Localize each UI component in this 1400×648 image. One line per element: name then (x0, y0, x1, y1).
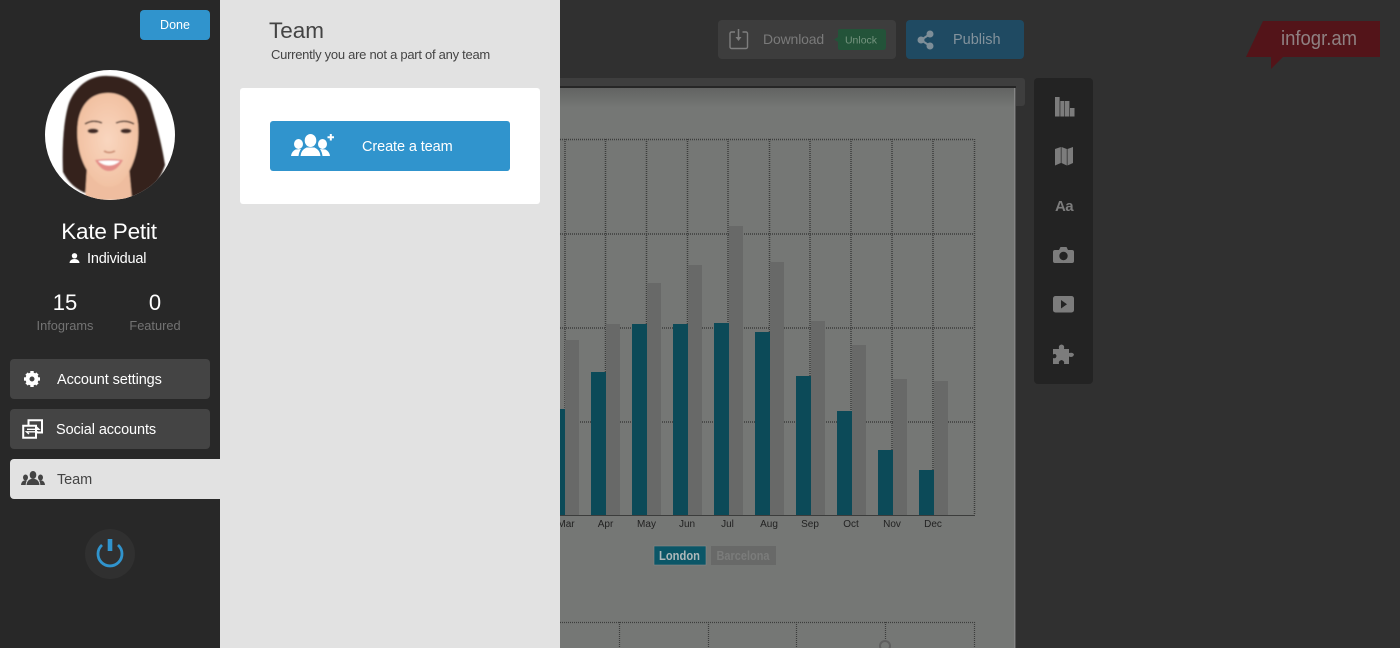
individual label: Individual (87, 251, 146, 267)
bar chart: London vs Barcelona (550, 139, 975, 516)
legend: London (659, 548, 700, 563)
editor canvas behind overlay (557, 78, 1025, 648)
menu: team active (10, 459, 220, 499)
legend: Barcelona (716, 548, 770, 563)
menu: account settings (10, 359, 210, 399)
month axis labels: Nov (883, 519, 901, 530)
month axis labels: Aug (760, 519, 778, 530)
team panel (220, 0, 560, 648)
stat: featured: 0 (149, 290, 161, 315)
publish button (906, 20, 1024, 59)
icon: puzzle (1053, 344, 1074, 364)
panel subtitle: Currently you are not a part of any team (271, 47, 490, 62)
done button (140, 10, 210, 40)
stat: infograms: 15 (53, 290, 77, 315)
download button (718, 20, 896, 59)
publish label: Publish (953, 32, 1001, 48)
canvas frame (540, 78, 1025, 106)
icon: map (1055, 147, 1073, 166)
white card (240, 88, 540, 204)
month axis labels: Mar (557, 519, 575, 530)
icon: chart (1055, 97, 1074, 116)
month axis labels: Dec (924, 519, 942, 530)
icon: text: Aa (1055, 198, 1073, 215)
icon: video (1053, 296, 1074, 312)
download label: Download (763, 31, 824, 47)
menu: social accounts (10, 409, 210, 449)
stat: infograms: Infograms (37, 318, 93, 333)
month axis labels: Apr (598, 519, 614, 530)
icon: team (21, 471, 45, 485)
label: Create a team (362, 139, 453, 155)
icon: power button (96, 539, 124, 568)
lower chart grid (560, 622, 974, 648)
icon: gear (24, 371, 40, 387)
done button: Done (160, 18, 190, 32)
label: Social accounts (56, 422, 156, 438)
label: Account settings (57, 372, 162, 388)
month axis labels: Jul (721, 519, 734, 530)
icon: social swap (22, 419, 43, 439)
month axis labels: Oct (843, 519, 859, 530)
tool palette (1034, 78, 1093, 384)
icon: add team (291, 134, 334, 156)
panel heading: Team (269, 18, 324, 43)
icon: camera (1053, 247, 1074, 263)
month axis labels: Jun (679, 519, 695, 530)
user name: Kate Petit (61, 219, 157, 244)
sidebar (10, 10, 220, 579)
infogr.am logo (1246, 21, 1380, 69)
icon: share (918, 30, 934, 50)
month axis labels (557, 519, 942, 530)
month axis labels: Sep (801, 519, 819, 530)
avatar photo (45, 70, 175, 200)
unlock badge (834, 29, 886, 50)
stat: featured (129, 290, 181, 333)
legend (654, 546, 776, 565)
stat: infograms (37, 290, 93, 333)
unlock badge: Unlock (845, 34, 878, 46)
icon: person (70, 253, 80, 263)
label: Team (57, 472, 92, 488)
icon: download (729, 29, 748, 50)
account type (70, 251, 146, 267)
infogr.am logo: infogr.am (1281, 28, 1357, 50)
create team button (270, 121, 510, 171)
chart sheet (557, 86, 1016, 648)
stat: featured: Featured (129, 318, 181, 333)
month axis labels: May (637, 519, 656, 530)
